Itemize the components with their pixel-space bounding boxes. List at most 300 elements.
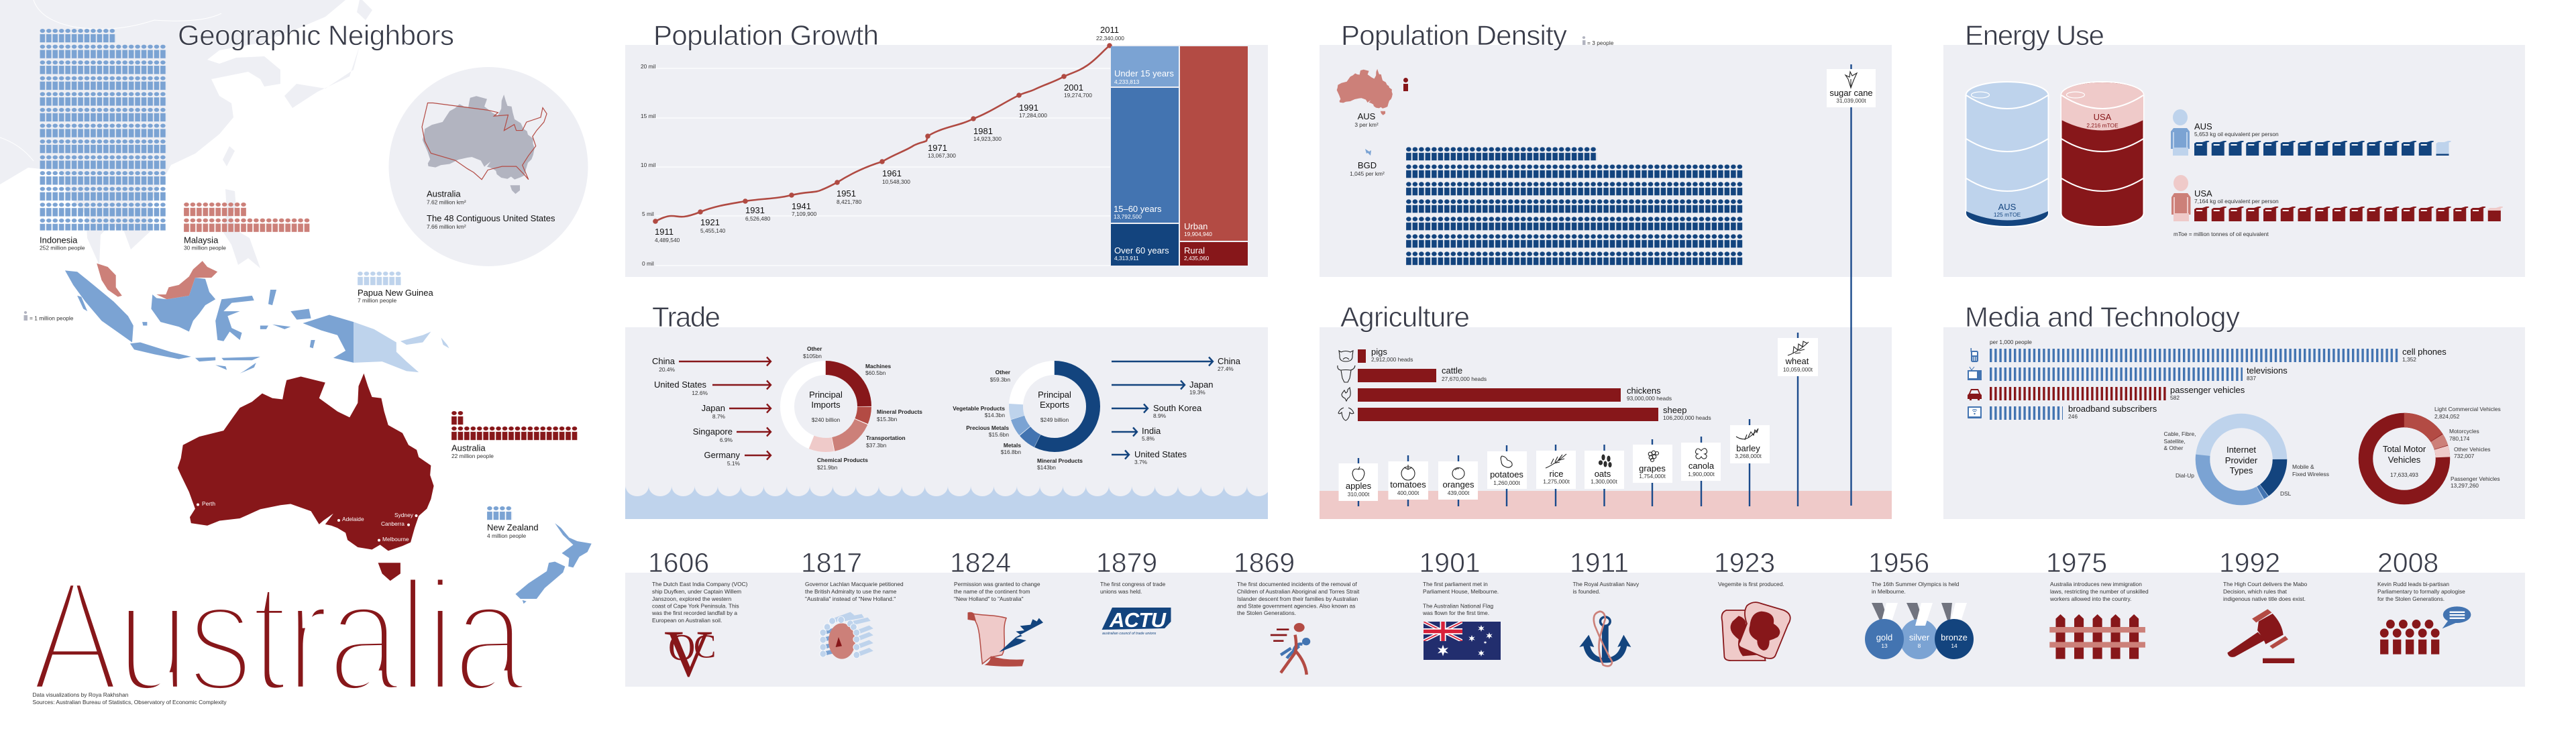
fuel cans: AUS xyxy=(2194,121,2451,156)
donut: internet provider types: Types xyxy=(2230,465,2253,475)
fuel cans: AUS: AUS xyxy=(2194,121,2212,131)
livestock bars: chickens xyxy=(1627,386,1661,396)
size comparison circle: 7.66 million km² xyxy=(427,223,466,230)
axis grid and labels xyxy=(641,63,1110,267)
export arrows: South Korea xyxy=(1153,403,1202,413)
Bangladesh density: 1,045 per km² xyxy=(1350,170,1385,177)
icon: toast with vegemite xyxy=(1722,602,1790,661)
data labels: 1931 xyxy=(745,205,765,215)
data labels: 7,109,900 xyxy=(792,211,817,217)
data labels: 1911 xyxy=(655,227,674,237)
donut: principal exports: Principal xyxy=(1038,390,1071,400)
line chart xyxy=(653,43,1112,224)
axis grid and labels: 15 mil xyxy=(641,113,655,119)
stacked column: urban and rural: 19,904,940 xyxy=(1184,231,1212,237)
size comparison circle: The 48 Contiguous United States xyxy=(427,213,555,223)
donut: principal imports xyxy=(788,345,922,471)
donut: internet provider types: Mobile & xyxy=(2292,463,2314,470)
donut: principal exports: Vegetable Products xyxy=(953,405,1005,412)
label: Indonesia: Indonesia xyxy=(40,235,78,245)
label: New Zealand xyxy=(487,522,539,539)
city labels: Sydney xyxy=(394,512,414,518)
panel: geographic neighbors xyxy=(0,0,592,724)
data labels: 19,274,700 xyxy=(1064,92,1092,99)
stacked column: age groups: Over 60 years xyxy=(1114,245,1169,255)
donut: principal imports: Imports xyxy=(811,400,841,410)
stems xyxy=(1358,64,1851,506)
barrel: AUS xyxy=(1966,82,2049,227)
donut: principal imports: Transportation xyxy=(866,435,906,441)
label: Malaysia xyxy=(184,235,226,251)
donut: principal imports: Chemical Products xyxy=(817,457,868,463)
water waves xyxy=(625,486,1268,519)
event 1869: Children of Australian Aboriginal and Torres Strait xyxy=(1237,588,1360,595)
icon: gavel xyxy=(2227,609,2294,663)
event 1901 xyxy=(1419,547,1501,660)
event 1879: The first congress of trade xyxy=(1100,581,1166,587)
event 2008 xyxy=(2377,547,2471,655)
event 1901: The Australian National Flag xyxy=(1423,602,1494,609)
icon: ACTU logo: ACTU xyxy=(1109,608,1167,632)
livestock bars: 106,200,000 heads xyxy=(1663,414,1711,421)
Australia density: AUS xyxy=(1358,111,1376,121)
data labels: 22,340,000 xyxy=(1096,35,1124,42)
Bangladesh density: BGD xyxy=(1358,160,1377,170)
donut: total motor vehicles: Total Motor xyxy=(2383,444,2426,454)
event 1869: 1869 xyxy=(1234,547,1295,578)
label: Australia population xyxy=(451,443,494,459)
event 1824: Permission was granted to change xyxy=(954,581,1040,587)
event 2008: for the Stolen Generations. xyxy=(2377,595,2445,602)
export arrows: United States xyxy=(1134,449,1187,459)
Bangladesh density xyxy=(1350,147,1743,265)
event 1606 xyxy=(648,547,748,691)
crop card: potatoes: 1,260,000t xyxy=(1493,479,1520,486)
label: Indonesia: 252 million people xyxy=(40,244,85,251)
data labels: 1921 xyxy=(700,217,720,227)
event 1901: 1901 xyxy=(1419,547,1481,578)
event 1992: indigenous native title does exist. xyxy=(2223,595,2306,602)
import arrows: China xyxy=(652,356,676,366)
donut: total motor vehicles: 2,824,052 xyxy=(2434,413,2460,420)
stacked column: age groups: 13,792,500 xyxy=(1114,213,1142,220)
panel: trade xyxy=(625,301,1268,519)
icon: medals xyxy=(1865,603,1974,659)
donut: total motor vehicles: 732,007 xyxy=(2454,453,2475,459)
event 1992 xyxy=(2219,547,2308,663)
stacked column: urban and rural: Urban xyxy=(1184,221,1208,231)
data labels: 1981 xyxy=(973,126,993,136)
label: Malaysia: 30 million people xyxy=(184,244,226,251)
event 1824: "New Holland" to "Australia" xyxy=(954,595,1024,602)
donut: principal imports: Other xyxy=(807,345,822,352)
person: USA energy xyxy=(2171,175,2191,221)
map: New Zealand xyxy=(515,523,592,604)
event 1975: 1975 xyxy=(2046,547,2107,578)
icon: broadband tablet xyxy=(1968,406,1982,418)
legend: three people: = 3 people xyxy=(1587,40,1614,46)
donut: total motor vehicles: Other Vehicles xyxy=(2454,446,2490,453)
crop card: tomatoes: 400,000t xyxy=(1397,490,1419,496)
fuel cans: USA: USA xyxy=(2194,188,2212,198)
stripe bars per 1000 people: 837 xyxy=(2247,375,2256,382)
pictogram: Australia 22 million xyxy=(451,411,578,440)
stacked column: urban and rural: Rural xyxy=(1184,245,1205,255)
donut: internet provider types: DSL xyxy=(2280,490,2292,497)
data labels: 2001 xyxy=(1064,82,1083,93)
donut: total motor vehicles: Passenger Vehicles xyxy=(2451,475,2500,482)
Australia density xyxy=(1337,69,1408,128)
icon: medals: silver xyxy=(1909,632,1930,642)
stacked column: age groups xyxy=(1111,46,1179,266)
pictogram: Indonesia 252 million xyxy=(40,29,166,231)
legend: one million people: = 1 million people xyxy=(30,315,74,322)
event 1824: 1824 xyxy=(950,547,1011,578)
icon: scroll and quill xyxy=(967,612,1043,667)
data labels: 1971 xyxy=(928,143,947,153)
event 1911 xyxy=(1570,547,1640,666)
event 1606: 1606 xyxy=(648,547,709,578)
livestock bars: 27,670,000 heads xyxy=(1442,376,1487,382)
donut: total motor vehicles xyxy=(2365,406,2501,498)
data labels: 17,284,000 xyxy=(1019,112,1047,119)
event 1901: Parliament House, Melbourne. xyxy=(1423,588,1499,595)
stripe bars per 1000 people: 582 xyxy=(2170,394,2180,401)
import arrows: 12.6% xyxy=(692,390,708,396)
donut: internet provider types xyxy=(2164,421,2329,498)
import arrows: United States xyxy=(654,380,707,390)
crop card: sugar cane xyxy=(1827,69,1876,107)
label: Malaysia: Malaysia xyxy=(184,235,219,245)
event 1879: unions was held. xyxy=(1100,588,1142,595)
event 1992: 1992 xyxy=(2219,547,2280,578)
event 1606: European on Australian soil. xyxy=(652,617,722,624)
crop card: wheat xyxy=(1778,338,1818,376)
donut: total motor vehicles: 17,633,493 xyxy=(2390,471,2418,478)
stacked column: age groups: 15–60 years xyxy=(1114,204,1162,214)
barrel: USA: 2,216 mTOE xyxy=(2086,122,2118,129)
import arrows: Singapore xyxy=(693,427,733,437)
data labels: 14,923,300 xyxy=(973,135,1002,142)
livestock bars: sheep xyxy=(1663,405,1686,415)
heading: population growth: Population Growth xyxy=(653,19,879,51)
crop card: sugar cane: sugar cane xyxy=(1829,88,1873,98)
import arrows xyxy=(652,356,771,467)
axis grid and labels: 0 mil xyxy=(642,260,654,267)
stripe bars per 1000 people: passenger vehicles xyxy=(2170,385,2245,395)
icon: car xyxy=(1968,389,1982,400)
barrel: AUS: 125 mTOE xyxy=(1994,211,2021,218)
donut: internet provider types: & Other xyxy=(2164,445,2184,451)
size comparison circle: 7.62 million km² xyxy=(427,199,466,206)
axis grid and labels: 10 mil xyxy=(641,162,655,168)
export arrows: 3.7% xyxy=(1134,459,1148,465)
event 1992: The High Court delivers the Mabo xyxy=(2223,581,2308,587)
city labels: Melbourne xyxy=(382,536,409,543)
crop card: oranges xyxy=(1438,461,1478,500)
data labels: 8,421,780 xyxy=(837,198,862,205)
city labels: Canberra xyxy=(381,520,405,527)
donut: principal exports: $249 billion xyxy=(1040,416,1069,423)
icon: VOC logo: O xyxy=(668,627,695,669)
stripe bars per 1000 people: 1,352 xyxy=(2402,356,2416,363)
donut: principal imports: $240 billion xyxy=(812,416,841,423)
data labels: 1991 xyxy=(1019,103,1038,113)
barrel: USA xyxy=(2061,82,2144,227)
icon: anchor xyxy=(1579,612,1631,666)
person: AUS energy xyxy=(2171,109,2190,156)
livestock bars xyxy=(1358,347,1711,421)
label: Australia population: Australia xyxy=(451,443,486,453)
donut: internet provider types: Satellite, xyxy=(2164,438,2186,445)
crop card: oats xyxy=(1585,451,1624,489)
icon: medals: 14 xyxy=(1951,642,1957,649)
crop card: apples xyxy=(1339,463,1378,501)
crop card: grapes: grapes xyxy=(1639,463,1666,473)
stripe bars per 1000 people: televisions xyxy=(2247,365,2288,376)
donut: total motor vehicles: Light Commercial Vehicles xyxy=(2434,406,2501,412)
heading: geographic neighbors: Geographic Neighbors xyxy=(178,19,454,51)
stripe bars per 1000 people xyxy=(1990,339,2447,420)
axis grid and labels: 5 mil xyxy=(642,211,654,217)
map: Australia xyxy=(178,374,434,581)
data labels: 1941 xyxy=(792,201,811,211)
crop card: rice: 1,275,000t xyxy=(1543,478,1570,485)
size comparison circle xyxy=(389,67,588,266)
event 1869: and State government agencies. Also known as xyxy=(1237,602,1355,609)
data labels: 1951 xyxy=(837,188,856,198)
import arrows: Germany xyxy=(704,450,740,460)
Australia density: 3 per km² xyxy=(1354,121,1379,128)
crop card: canola xyxy=(1681,443,1721,481)
stripe bars per 1000 people: per 1,000 people xyxy=(1990,339,2032,345)
donut: principal imports: Mineral Products xyxy=(877,408,922,415)
event 1956: in Melbourne. xyxy=(1872,588,1906,595)
data labels: 6,526,480 xyxy=(745,215,771,222)
import arrows: 5.1% xyxy=(727,460,741,467)
donut: principal exports xyxy=(953,367,1093,471)
event 1606: ship Duyfken, under Captain Willem xyxy=(652,588,741,595)
legend: three people xyxy=(1582,36,1614,46)
panel: media and technology xyxy=(1943,301,2525,519)
stripe bars per 1000 people: broadband subscribers xyxy=(2068,404,2157,414)
panel: agriculture xyxy=(1320,64,1892,519)
event 1869 xyxy=(1234,547,1360,675)
event 1817: the British Admiralty to use the name xyxy=(805,588,897,595)
icon: medals: 13 xyxy=(1881,642,1888,649)
event 1817: "Australia" instead of "New Holland." xyxy=(805,595,896,602)
event 1956: 1956 xyxy=(1868,547,1929,578)
donut: principal imports: $37.3bn xyxy=(866,442,887,449)
event 1606: Janszoon, explored the western xyxy=(652,595,732,602)
panel: population growth xyxy=(625,19,1268,277)
event 1992: Decision, which rules that xyxy=(2223,588,2288,595)
icon: medals: gold xyxy=(1876,632,1892,642)
donut: principal imports: Principal xyxy=(809,390,843,400)
icon: ACTU logo: australian council of trade unions xyxy=(1102,632,1157,636)
icon: VOC logo: V xyxy=(664,616,712,691)
crop card: wheat: wheat xyxy=(1785,356,1809,366)
US outline xyxy=(422,103,547,180)
export arrows: China xyxy=(1218,356,1241,366)
label: New Zealand: 4 million people xyxy=(487,532,527,539)
crop card: oranges: oranges xyxy=(1443,479,1474,490)
axis grid and labels: 20 mil xyxy=(641,63,655,70)
icon: ACTU logo xyxy=(1102,608,1171,636)
fuel cans: USA xyxy=(2194,188,2503,222)
donut: principal exports: $59.3bn xyxy=(990,376,1010,383)
crop card: barley: 3,268,000t xyxy=(1735,453,1762,459)
heading: trade: Trade xyxy=(652,301,720,333)
donut: principal exports: Mineral Products xyxy=(1037,457,1083,464)
label: Papua New Guinea: 7 million people xyxy=(358,297,397,304)
crop card: grapes xyxy=(1633,445,1672,483)
livestock bars: pigs xyxy=(1371,347,1387,357)
event 1975: workers allowed into the country. xyxy=(2049,595,2131,602)
event 1911: is founded. xyxy=(1572,588,1600,595)
crop card: barley: barley xyxy=(1736,443,1760,453)
heading: population density: Population Density xyxy=(1341,19,1567,51)
crop card: potatoes xyxy=(1487,451,1527,489)
event 2008: Kevin Rudd leads bi-partisan xyxy=(2377,581,2449,587)
icon: medals: bronze xyxy=(1941,632,1968,642)
event 1923: Vegemite is first produced. xyxy=(1718,581,1784,587)
event 1975: Australia introduces new immigration xyxy=(2050,581,2142,587)
heading: agriculture: Agriculture xyxy=(1340,301,1470,333)
stacked column: age groups: 4,313,911 xyxy=(1114,255,1139,262)
donut: principal exports: Precious Metals xyxy=(966,424,1009,431)
city labels: Adelaide xyxy=(342,516,364,522)
donut: principal imports: $21.9bn xyxy=(817,464,838,471)
event 1923 xyxy=(1714,547,1790,661)
stacked column: urban and rural: 2,435,060 xyxy=(1184,255,1210,262)
fuel cans: USA: 7,164 kg oil equivalent per person xyxy=(2194,198,2279,205)
donut: total motor vehicles: 13,297,260 xyxy=(2451,482,2479,489)
label: Indonesia xyxy=(40,235,85,251)
event 2008: 2008 xyxy=(2377,547,2438,578)
background map of Asia xyxy=(0,0,372,268)
crop card: canola: 1,900,000t xyxy=(1688,471,1715,477)
event 1869: The first documented incidents of the removal of xyxy=(1237,581,1357,587)
export arrows: 8.9% xyxy=(1153,412,1167,419)
pictogram: New Zealand xyxy=(487,506,513,520)
crop card: grapes: 1,754,000t xyxy=(1639,473,1666,479)
icon: medals: 8 xyxy=(1918,642,1921,649)
event 1606: The Dutch East India Company (VOC) xyxy=(652,581,748,587)
data labels: 1961 xyxy=(882,168,902,178)
crop card: canola: canola xyxy=(1688,461,1715,471)
livestock bars: 93,000,000 heads xyxy=(1627,395,1672,402)
pictogram: Malaysia 30 million xyxy=(184,203,311,232)
event 1923: 1923 xyxy=(1714,547,1775,578)
barrel: USA: USA xyxy=(2094,112,2112,122)
icon: picket fence xyxy=(2049,614,2145,659)
heading: energy use: Energy Use xyxy=(1965,19,2104,51)
donut: principal exports: $14.3bn xyxy=(985,412,1005,418)
crop card: potatoes: potatoes xyxy=(1490,469,1523,479)
event 1817: 1817 xyxy=(801,547,862,578)
event 1817 xyxy=(801,547,904,659)
export arrows: Japan xyxy=(1189,380,1213,390)
panel: timeline xyxy=(625,547,2525,691)
import arrows: 8.7% xyxy=(712,413,726,420)
donut: principal exports: Exports xyxy=(1040,400,1070,410)
export arrows: India xyxy=(1142,426,1161,436)
label: New Zealand: New Zealand xyxy=(487,522,539,532)
Australia silhouette xyxy=(423,95,535,194)
donut: internet provider types: Fixed Wireless xyxy=(2292,471,2329,477)
event 1824: the name of the continent from xyxy=(954,588,1030,595)
donut: internet provider types: Provider xyxy=(2225,455,2258,465)
donut: principal imports: Machines xyxy=(865,363,892,370)
donut: total motor vehicles: Vehicles xyxy=(2388,455,2421,465)
data labels: 2011 xyxy=(1100,25,1119,35)
map: Indonesia, Malaysia, Papua New Guinea xyxy=(65,261,449,374)
legend: one million people xyxy=(24,311,74,322)
size comparison circle: Australia xyxy=(427,189,461,198)
import arrows: 6.9% xyxy=(720,437,733,443)
icon: cell phone xyxy=(1971,348,1978,362)
event 1869: the Stolen Generations. xyxy=(1237,610,1296,616)
crop card: oranges: 439,000t xyxy=(1448,490,1470,496)
donut: principal imports: $15.3bn xyxy=(877,416,898,422)
crop card: barley xyxy=(1730,425,1770,463)
heading: media and technology: Media and Technology xyxy=(1965,301,2240,333)
crop card: rice: rice xyxy=(1550,469,1563,479)
donut: internet provider types: Cable, Fibre, xyxy=(2164,431,2196,437)
stacked column: age groups: 4,233,813 xyxy=(1114,78,1140,85)
donut: principal exports: $143bn xyxy=(1037,464,1056,471)
event 1911: The Royal Australian Navy xyxy=(1572,581,1640,587)
stacked column: age groups: Under 15 years xyxy=(1114,68,1174,78)
stripe bars per 1000 people: cell phones xyxy=(2402,347,2447,357)
crop card: sugar cane: 31,039,000t xyxy=(1836,97,1866,104)
donut: principal imports: $60.5bn xyxy=(865,370,886,376)
label: Papua New Guinea: Papua New Guinea xyxy=(358,288,434,298)
data labels: 5,455,140 xyxy=(700,227,726,234)
event 1817: Governor Lachlan Macquarie petitioned xyxy=(805,581,904,587)
icon: runner and child xyxy=(1271,623,1310,675)
stacked column: urban and rural xyxy=(1180,46,1248,266)
label: Papua New Guinea xyxy=(358,288,434,304)
donut: internet provider types: Internet xyxy=(2226,445,2256,455)
note: mToe: mToe = million tonnes of oil equivalent xyxy=(2174,231,2269,237)
event 1956: The 16th Summer Olympics is held xyxy=(1872,581,1960,587)
panel: energy use xyxy=(1943,19,2525,277)
city labels xyxy=(197,500,417,543)
event 1869: Islander descent from their families by Australian xyxy=(1237,595,1358,602)
event 1879: 1879 xyxy=(1096,547,1157,578)
data labels xyxy=(655,25,1124,243)
data labels: 13,067,300 xyxy=(928,152,956,159)
fuel cans: AUS: 5,653 kg oil equivalent per person xyxy=(2194,131,2279,137)
crop card: oats: 1,300,000t xyxy=(1591,478,1617,485)
event 1956 xyxy=(1865,547,1974,659)
icon: judge wig xyxy=(820,614,871,659)
icons: livestock xyxy=(1338,351,1355,420)
export arrows: 5.8% xyxy=(1142,435,1155,442)
crop card: tomatoes xyxy=(1389,461,1428,500)
event 1975 xyxy=(2046,547,2149,659)
event 1901: The first parliament met in xyxy=(1423,581,1488,587)
icon: VOC logo: C xyxy=(694,627,716,665)
icon: crowd and speech bubble xyxy=(2380,606,2471,655)
donut: total motor vehicles: 780,174 xyxy=(2449,435,2470,442)
icon: television xyxy=(1968,367,1982,380)
event 2008: Parliamentary to formally apologise xyxy=(2377,588,2465,595)
event 1901: was flown for the first time. xyxy=(1422,610,1489,616)
event 1824 xyxy=(950,547,1043,667)
